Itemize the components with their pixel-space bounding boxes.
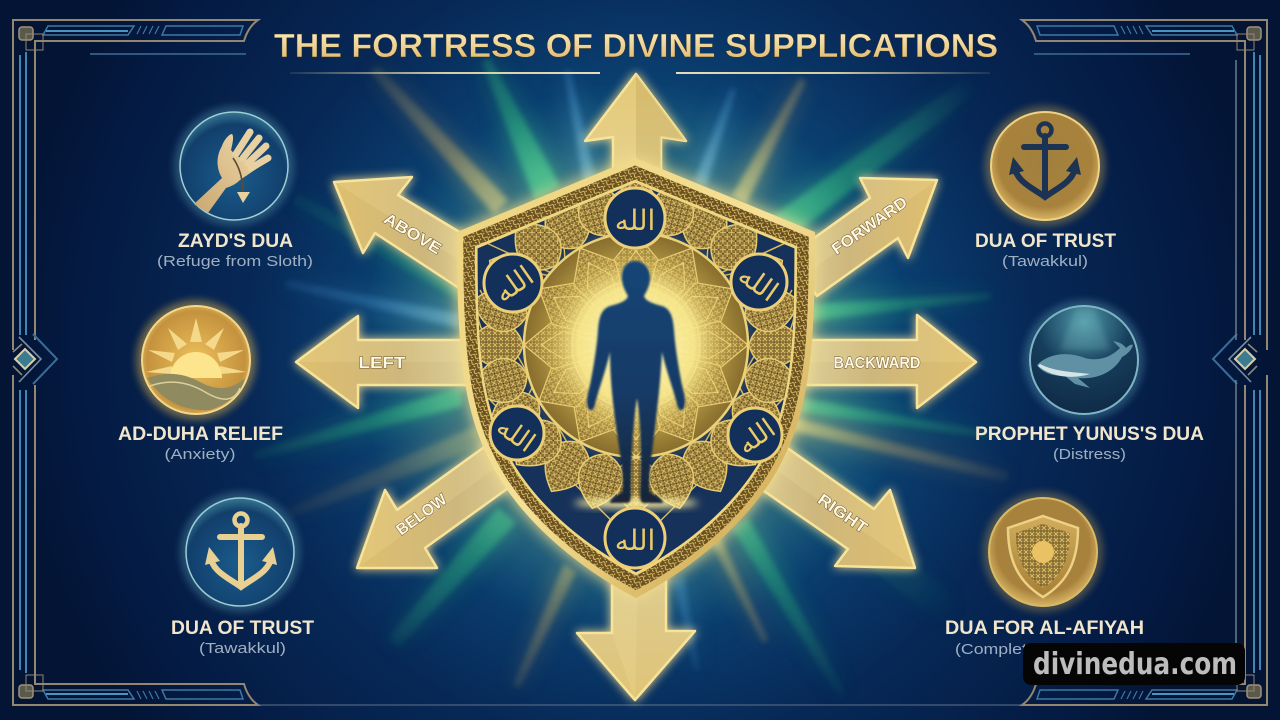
ground glow — [574, 498, 698, 508]
label: above: ABOVE — [380, 211, 444, 258]
arrow: above — [334, 177, 486, 290]
arrow: down — [577, 575, 695, 700]
item: Dua of Trust left — [171, 492, 314, 657]
medallion: top — [605, 188, 665, 248]
icon: gold anchor — [180, 492, 300, 612]
watermark: divinedua.com — [1033, 647, 1237, 682]
arrow: backward — [800, 315, 976, 408]
title underline — [290, 72, 990, 74]
item: Zayd's Dua — [157, 106, 313, 270]
item: Prophet Yunus's Dua — [975, 300, 1204, 463]
label: forward: FORWARD — [829, 194, 911, 258]
item: Ad-Duha Relief — [118, 300, 283, 463]
arrow: left — [296, 316, 470, 408]
subheading: (Tawakkul) — [1002, 253, 1088, 270]
subheading: (Anxiety) — [164, 446, 236, 463]
medallion: lower right: الله — [732, 413, 781, 461]
item: Dua of Trust right — [975, 106, 1116, 270]
heading: PROPHET YUNUS'S DUA — [975, 424, 1204, 445]
label: left: LEFT — [358, 355, 406, 372]
medallion: upper right: الله — [732, 258, 784, 308]
arrow: forward — [789, 178, 937, 296]
medallion: top: الله — [615, 204, 655, 237]
subheading: (Tawakkul) — [199, 640, 286, 657]
heading: DUA OF TRUST — [975, 231, 1116, 252]
outer lobes and lattice — [478, 182, 794, 521]
label: below: BELOW — [393, 491, 451, 539]
mandala disc — [524, 233, 748, 457]
arrow: below — [357, 440, 522, 568]
subheading: (Refuge from Sloth) — [157, 253, 313, 270]
subheading: (Complete Wellbeing) — [955, 641, 1125, 658]
title: THE FORTRESS OF DIVINE SUPPLICATIONS — [274, 28, 998, 65]
medallion: bottom: الله — [615, 524, 655, 557]
icon: mini shield — [983, 492, 1103, 612]
icon: sun — [136, 300, 256, 420]
medallion: upper left: الله — [488, 259, 540, 309]
medallion: bottom — [605, 508, 665, 568]
mandala petals — [524, 233, 748, 457]
label: right: RIGHT — [814, 491, 870, 537]
heading: DUA FOR AL-AFIYAH — [945, 618, 1144, 639]
central glow — [518, 227, 754, 463]
arrow: right — [748, 440, 915, 568]
subheading: (Distress) — [1053, 446, 1126, 463]
icon: hand — [174, 106, 294, 226]
light rays — [253, 56, 1010, 699]
icon: whale — [1024, 300, 1144, 420]
heading: ZAYD'S DUA — [178, 231, 293, 252]
human silhouette — [587, 261, 685, 503]
medallion: lower left: الله — [491, 411, 540, 459]
heading: AD-DUHA RELIEF — [118, 424, 283, 445]
central shield — [457, 158, 815, 598]
item: Dua for Al-Afiyah — [945, 492, 1144, 658]
heading: DUA OF TRUST — [171, 618, 314, 639]
icon: navy anchor — [985, 106, 1105, 226]
label: backward: BACKWARD — [834, 355, 920, 372]
arrow: up — [585, 74, 686, 190]
